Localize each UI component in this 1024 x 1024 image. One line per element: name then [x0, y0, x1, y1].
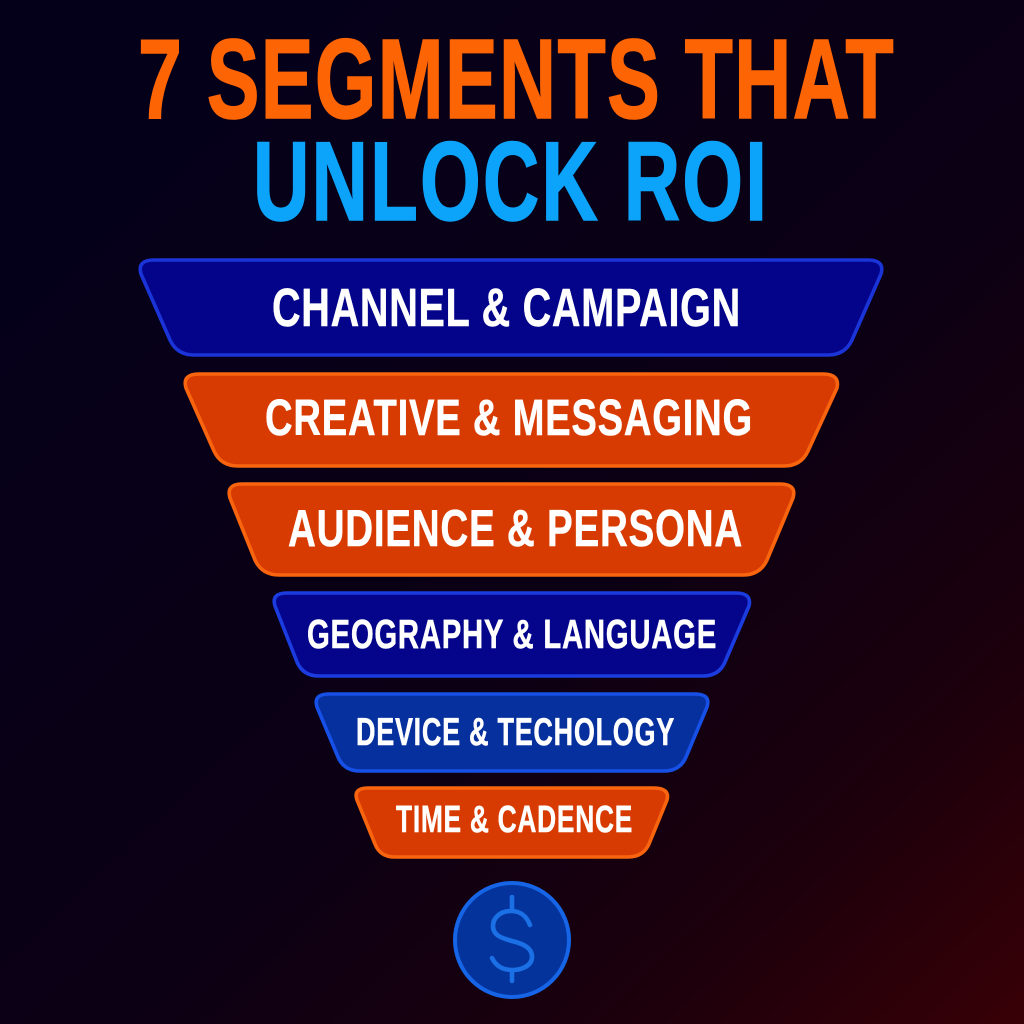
segment 4: geography and language	[274, 593, 749, 676]
segment 2: creative and messaging	[185, 374, 837, 466]
segment 6: time and cadence: TIME & CADENCE	[396, 799, 633, 841]
segment 3: audience and persona: AUDIENCE & PERSONA	[288, 500, 743, 558]
segment 3: audience and persona	[229, 484, 794, 575]
title line 2: UNLOCK ROI	[253, 119, 769, 244]
title	[138, 16, 895, 244]
segment 2: creative and messaging: CREATIVE & MESSAGING	[265, 389, 753, 446]
segment 1: channel and campaign	[140, 260, 882, 355]
icon: dollar coin	[455, 883, 569, 997]
segment 5: device and technology: DEVICE & TECHOLOGY	[356, 711, 675, 754]
segment 6: time and cadence	[356, 788, 667, 857]
segment 5: device and technology	[316, 694, 708, 771]
segment 4: geography and language: GEOGRAPHY & LANGUAGE	[307, 611, 717, 657]
funnel	[140, 260, 882, 857]
segment 1: channel and campaign: CHANNEL & CAMPAIGN	[272, 278, 741, 338]
